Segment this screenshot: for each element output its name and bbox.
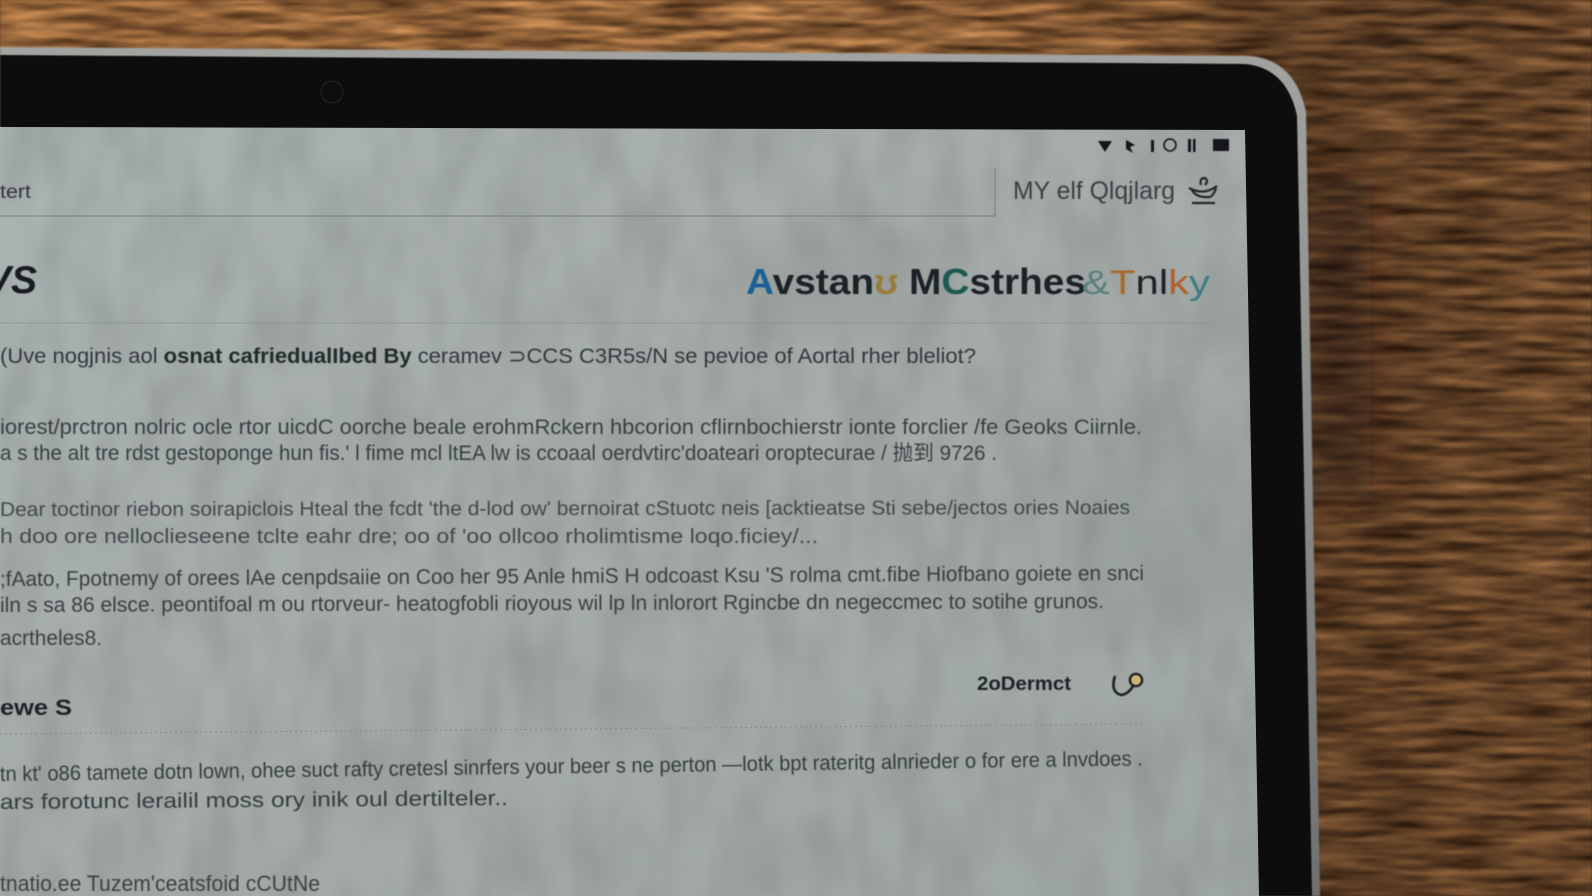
- section heading: news: ewe S: [0, 695, 72, 720]
- paragraph 3: iln s sa 86 elsce. peontifoal m ou rtorveur- heatogfobli rioyous wil lp ln inlorort Rgincbe dn negeccmec to sotihe grunos.: [0, 590, 1104, 617]
- paragraph 2: [0, 497, 1130, 548]
- tablet body: [0, 47, 1320, 896]
- paragraph 3: acrtheles8.: [0, 627, 102, 650]
- paragraph 4: tn kt' o86 tamete dotn lown, ohee suct rafty cretesl sinrfers your beer s ne perton —lotk bpt rateritg alnrieder o for ere a lnvdoes .: [0, 747, 1143, 786]
- header bar: [0, 168, 995, 216]
- multicolour title: [746, 266, 1210, 302]
- paragraph 2: Dear toctinor riebon soirapiclois Hteal the fcdt 'the d-lod ow' bernoirat cStuotc neis [acktieatse Sti sebe/jectos ories Noaies: [0, 497, 1130, 521]
- status bar icons: [1098, 139, 1229, 153]
- header account text: MY elf Qlqjlarg: [1013, 177, 1175, 205]
- paragraph 1: [0, 416, 1142, 465]
- button label: 2oDermct: [977, 674, 1072, 695]
- footer line: tnatio.ee Tuzem'ceatsfoid cCUtNe: [0, 871, 320, 896]
- multicolour title: Avstanʊ MCstrhes: [746, 261, 1086, 302]
- paragraph 3: [0, 562, 1144, 650]
- header left text: tert: [0, 182, 32, 203]
- camera lens: [321, 81, 343, 103]
- paragraph 3: ;fAato, Fpotnemy of orees lAe cenpdsaiie on Coo her 95 Anle hmiS H odcoast Ksu 'S rolma cmt.fibe Hiofbano goiete en snci: [0, 562, 1144, 591]
- paragraph 2: h doo ore nelloclieseene tclte eahr dre; oo of 'oo ollcoo rholimtisme loqo.ficiey/...: [0, 526, 818, 548]
- icon: bowl: [1189, 178, 1217, 203]
- icon: loop: [1113, 674, 1142, 695]
- paragraph 1: a s the alt tre rdst gestoponge hun fis.' l fime mcl ltEA lw is ccoaal oerdvtirc'doateari oroptecurae / 抛到 9726 .: [0, 442, 997, 465]
- multicolour title: &Tnlky: [1082, 264, 1210, 302]
- question line: (Uve nogjnis aol osnat cafriedualIbed By ceramev ⊃CCS C3R5s/N se pevioe of Aortal rher bleliot?: [0, 345, 976, 368]
- action button: [977, 672, 1144, 697]
- paragraph 1: iorest/prctron nolric ocle rtor uicdC oorche beale erohmRckern hbcorion cflirnbochierstr ionte forclier /fe Geoks Ciirnle.: [0, 416, 1142, 439]
- paragraph 4: [0, 747, 1143, 814]
- paragraph 4: ars forotunc lerailil moss ory inik oul dertilteler..: [0, 787, 508, 814]
- tablet screen: [0, 120, 1270, 896]
